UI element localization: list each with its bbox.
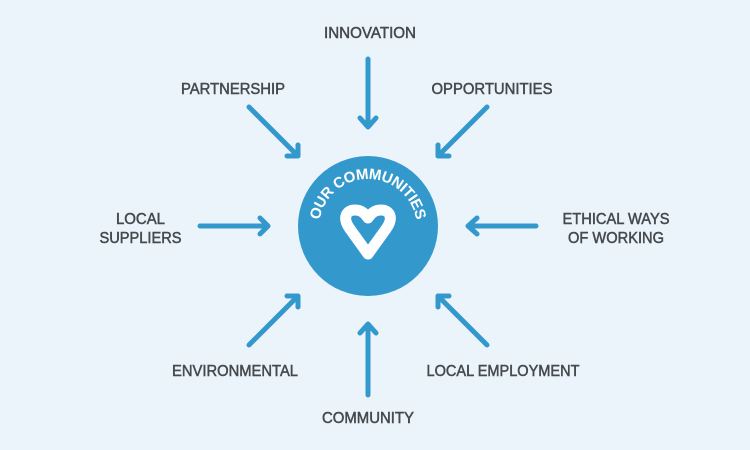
arrow: partnership (249, 107, 298, 156)
label: opportunities: OPPORTUNITIES (432, 81, 552, 98)
label: ethical ways of working: ETHICAL WAYS (562, 211, 670, 228)
label: local employment: LOCAL EMPLOYMENT (426, 363, 580, 380)
label: environmental: ENVIRONMENTAL (172, 363, 298, 380)
label: innovation: INNOVATION (324, 25, 416, 42)
arrow: innovation (360, 59, 376, 127)
arrow: local suppliers (200, 218, 268, 234)
label: local suppliers: SUPPLIERS (100, 230, 182, 247)
label: ethical ways of working: OF WORKING (568, 230, 664, 247)
arrow: community (360, 324, 376, 395)
label: local suppliers: LOCAL (116, 211, 165, 228)
label: partnership: PARTNERSHIP (181, 81, 285, 98)
arrow: opportunities (438, 107, 487, 156)
arrow: ethical ways of working (468, 218, 536, 234)
label: community: COMMUNITY (322, 410, 414, 427)
central circle: our communities (298, 156, 438, 296)
arrow: local employment (438, 296, 487, 345)
arrow: environmental (249, 296, 298, 345)
icon: heart (346, 210, 390, 254)
curved title: our communities: OUR COMMUNITIES (310, 168, 426, 219)
